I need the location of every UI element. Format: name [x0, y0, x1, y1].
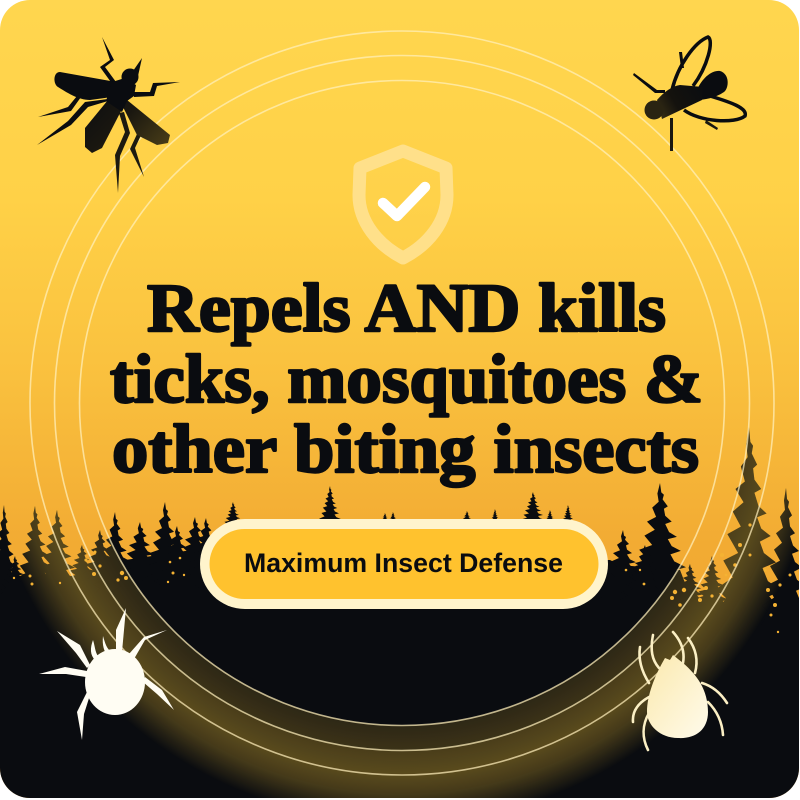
pill button: Maximum Insect Defense: Maximum Insect Defense — [244, 548, 563, 578]
heading: other biting insects — [112, 411, 699, 487]
yellow specks in the tree line — [13, 523, 792, 633]
icon: cream tick, lower right — [633, 632, 727, 750]
icon: shield with check — [359, 151, 447, 258]
heading: ticks, mosquitoes & — [110, 341, 703, 417]
forest silhouette and dark ground — [0, 427, 800, 800]
heading — [110, 270, 703, 487]
icon: fly — [633, 37, 745, 151]
icon: white tick, lower left — [39, 608, 174, 740]
pill button: Maximum Insect Defense — [200, 519, 608, 609]
glow ring over the dark ground — [2, 429, 794, 798]
heading: Repels AND kills — [147, 270, 666, 346]
icon: mosquito — [37, 37, 180, 193]
